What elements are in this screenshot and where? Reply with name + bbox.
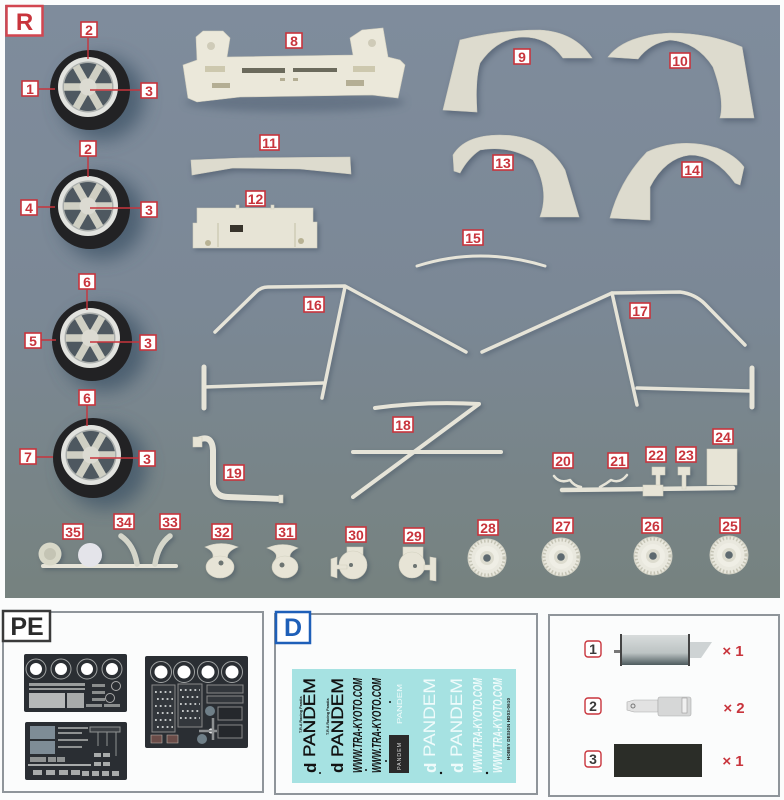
part 13: fender (453, 135, 579, 217)
number labels: 17 (632, 303, 648, 319)
part 9: fender (443, 30, 592, 112)
part 31: knob (267, 544, 298, 578)
small print: HOBBY DESIGN HD03-0610 (506, 698, 511, 760)
number labels: 35 (65, 524, 81, 540)
white Pandem logos: d (448, 763, 467, 773)
item 1: muffler: × 1 (722, 643, 744, 660)
number labels: 3 (145, 83, 153, 99)
etched fret: right (145, 656, 248, 748)
number labels: 21 (610, 453, 626, 469)
number labels (20, 22, 740, 544)
black Pandem logos: WWW.TRA-KYOTO.COM (369, 677, 384, 773)
black Pandem logos (299, 677, 384, 774)
black Pandem logos: T.R.A Racing Pandia (299, 696, 303, 733)
number labels: 32 (214, 524, 230, 540)
number labels: 13 (495, 155, 511, 171)
panel: extra parts list (549, 615, 779, 796)
number labels: 4 (25, 200, 33, 216)
item 2: seat belt buckle: × 2 (723, 700, 745, 717)
black Pandem logos: T.R.A Racing Pandia (326, 698, 330, 735)
D tag (276, 612, 310, 643)
item 1: muffler: 1 (589, 641, 597, 657)
panel: R resin parts photo (5, 5, 780, 598)
part 26: gear wheel (634, 537, 672, 575)
number labels: 23 (678, 447, 694, 463)
part 12: dashboard block (193, 205, 317, 248)
number labels: 28 (480, 520, 496, 536)
number labels: 24 (715, 429, 731, 445)
wheel 3 (52, 301, 146, 391)
etched fret: top left (24, 654, 127, 712)
number labels: 3 (143, 451, 151, 467)
number labels: 9 (518, 49, 526, 65)
wheel 2 (50, 169, 144, 259)
number labels: 31 (278, 524, 294, 540)
item 3: black sheet (585, 744, 744, 777)
number labels: 1 (26, 81, 34, 97)
part 10: fender (608, 33, 754, 118)
black Pandem logos: PANDEM (328, 678, 347, 757)
number labels: 27 (555, 518, 571, 534)
white Pandem logos: PANDEM (420, 678, 439, 757)
number labels: 22 (648, 447, 664, 463)
part 8: front bumper (183, 28, 405, 112)
number labels: 10 (672, 53, 688, 69)
part 28: gear wheel (468, 539, 506, 577)
item 1: muffler (585, 634, 744, 666)
R tag: R (16, 9, 33, 36)
wheels (50, 50, 147, 508)
number labels: 34 (116, 514, 132, 530)
PE tag (3, 611, 50, 641)
part 29: bracket (399, 547, 436, 581)
leader lines (36, 38, 140, 458)
wheel 1 (50, 50, 144, 140)
part 14: fender (610, 143, 744, 220)
etched fret: bottom left (25, 722, 127, 780)
part 11: spoiler (191, 157, 351, 175)
white Pandem logos (397, 677, 505, 773)
number labels: 11 (262, 135, 277, 151)
number labels: 6 (83, 274, 91, 290)
part 18: bracing bars (353, 403, 501, 497)
number labels: 25 (722, 518, 738, 534)
black Pandem logos: d (301, 763, 320, 773)
black Pandem logos: d (328, 763, 347, 773)
number labels: 12 (248, 191, 263, 207)
number labels: 14 (684, 162, 700, 178)
number labels: 26 (644, 518, 660, 534)
parts 20-24: runner with small parts (554, 449, 737, 496)
item 2: seat belt buckle: 2 (589, 698, 597, 714)
number labels: 29 (406, 528, 422, 544)
part 17: roll cage (482, 292, 752, 407)
part 25: gear wheel (710, 536, 748, 574)
number labels: 15 (465, 230, 481, 246)
item 3: black sheet: 3 (589, 751, 597, 767)
part 30: bracket (331, 547, 367, 579)
part 16: roll cage (204, 286, 466, 408)
white Pandem logos: WWW.TRA-KYOTO.COM (490, 677, 505, 773)
panel: D decals (275, 612, 537, 794)
white Pandem logos: WWW.TRA-KYOTO.COM (470, 677, 485, 773)
wheel 4 (53, 418, 147, 508)
number labels: 30 (348, 527, 364, 543)
part 19: exhaust pipe (193, 437, 283, 503)
number labels: 3 (144, 335, 152, 351)
R tag (6, 6, 42, 36)
parts 33-35: lamp and curved parts runner (38, 536, 176, 567)
number labels: 2 (85, 22, 93, 38)
number labels: 18 (395, 417, 411, 433)
number labels: 7 (24, 449, 32, 465)
number labels: 20 (555, 453, 571, 469)
number labels: 16 (306, 297, 322, 313)
part 27: gear wheel (542, 538, 580, 576)
white Pandem logos: PANDEM (447, 678, 466, 757)
number labels: 2 (84, 141, 92, 157)
D tag: D (284, 614, 302, 642)
item 3: black sheet: × 1 (722, 753, 744, 770)
PE tag: PE (10, 613, 44, 641)
panel: PE photo-etched parts (3, 611, 263, 792)
part 32: knob (205, 544, 238, 578)
black label with Pandem: PANDEM (397, 742, 403, 770)
white Pandem logos: PANDEM (397, 684, 404, 724)
decal sheet (292, 669, 516, 783)
number labels: 6 (83, 390, 91, 406)
number labels: 19 (226, 465, 242, 481)
black Pandem logos: . (320, 770, 321, 774)
black Pandem logos: PANDEM (300, 678, 319, 757)
black Pandem logos: WWW.TRA-KYOTO.COM (350, 677, 365, 773)
white Pandem logos: d (421, 763, 440, 773)
item 2: seat belt buckle (585, 697, 745, 717)
registration dots (319, 701, 488, 774)
number labels: 3 (145, 202, 153, 218)
number labels: 8 (290, 33, 298, 49)
black label with Pandem (389, 735, 409, 773)
part 15: roof bar (417, 256, 545, 266)
number labels: 33 (162, 514, 178, 530)
number labels: 5 (29, 333, 37, 349)
